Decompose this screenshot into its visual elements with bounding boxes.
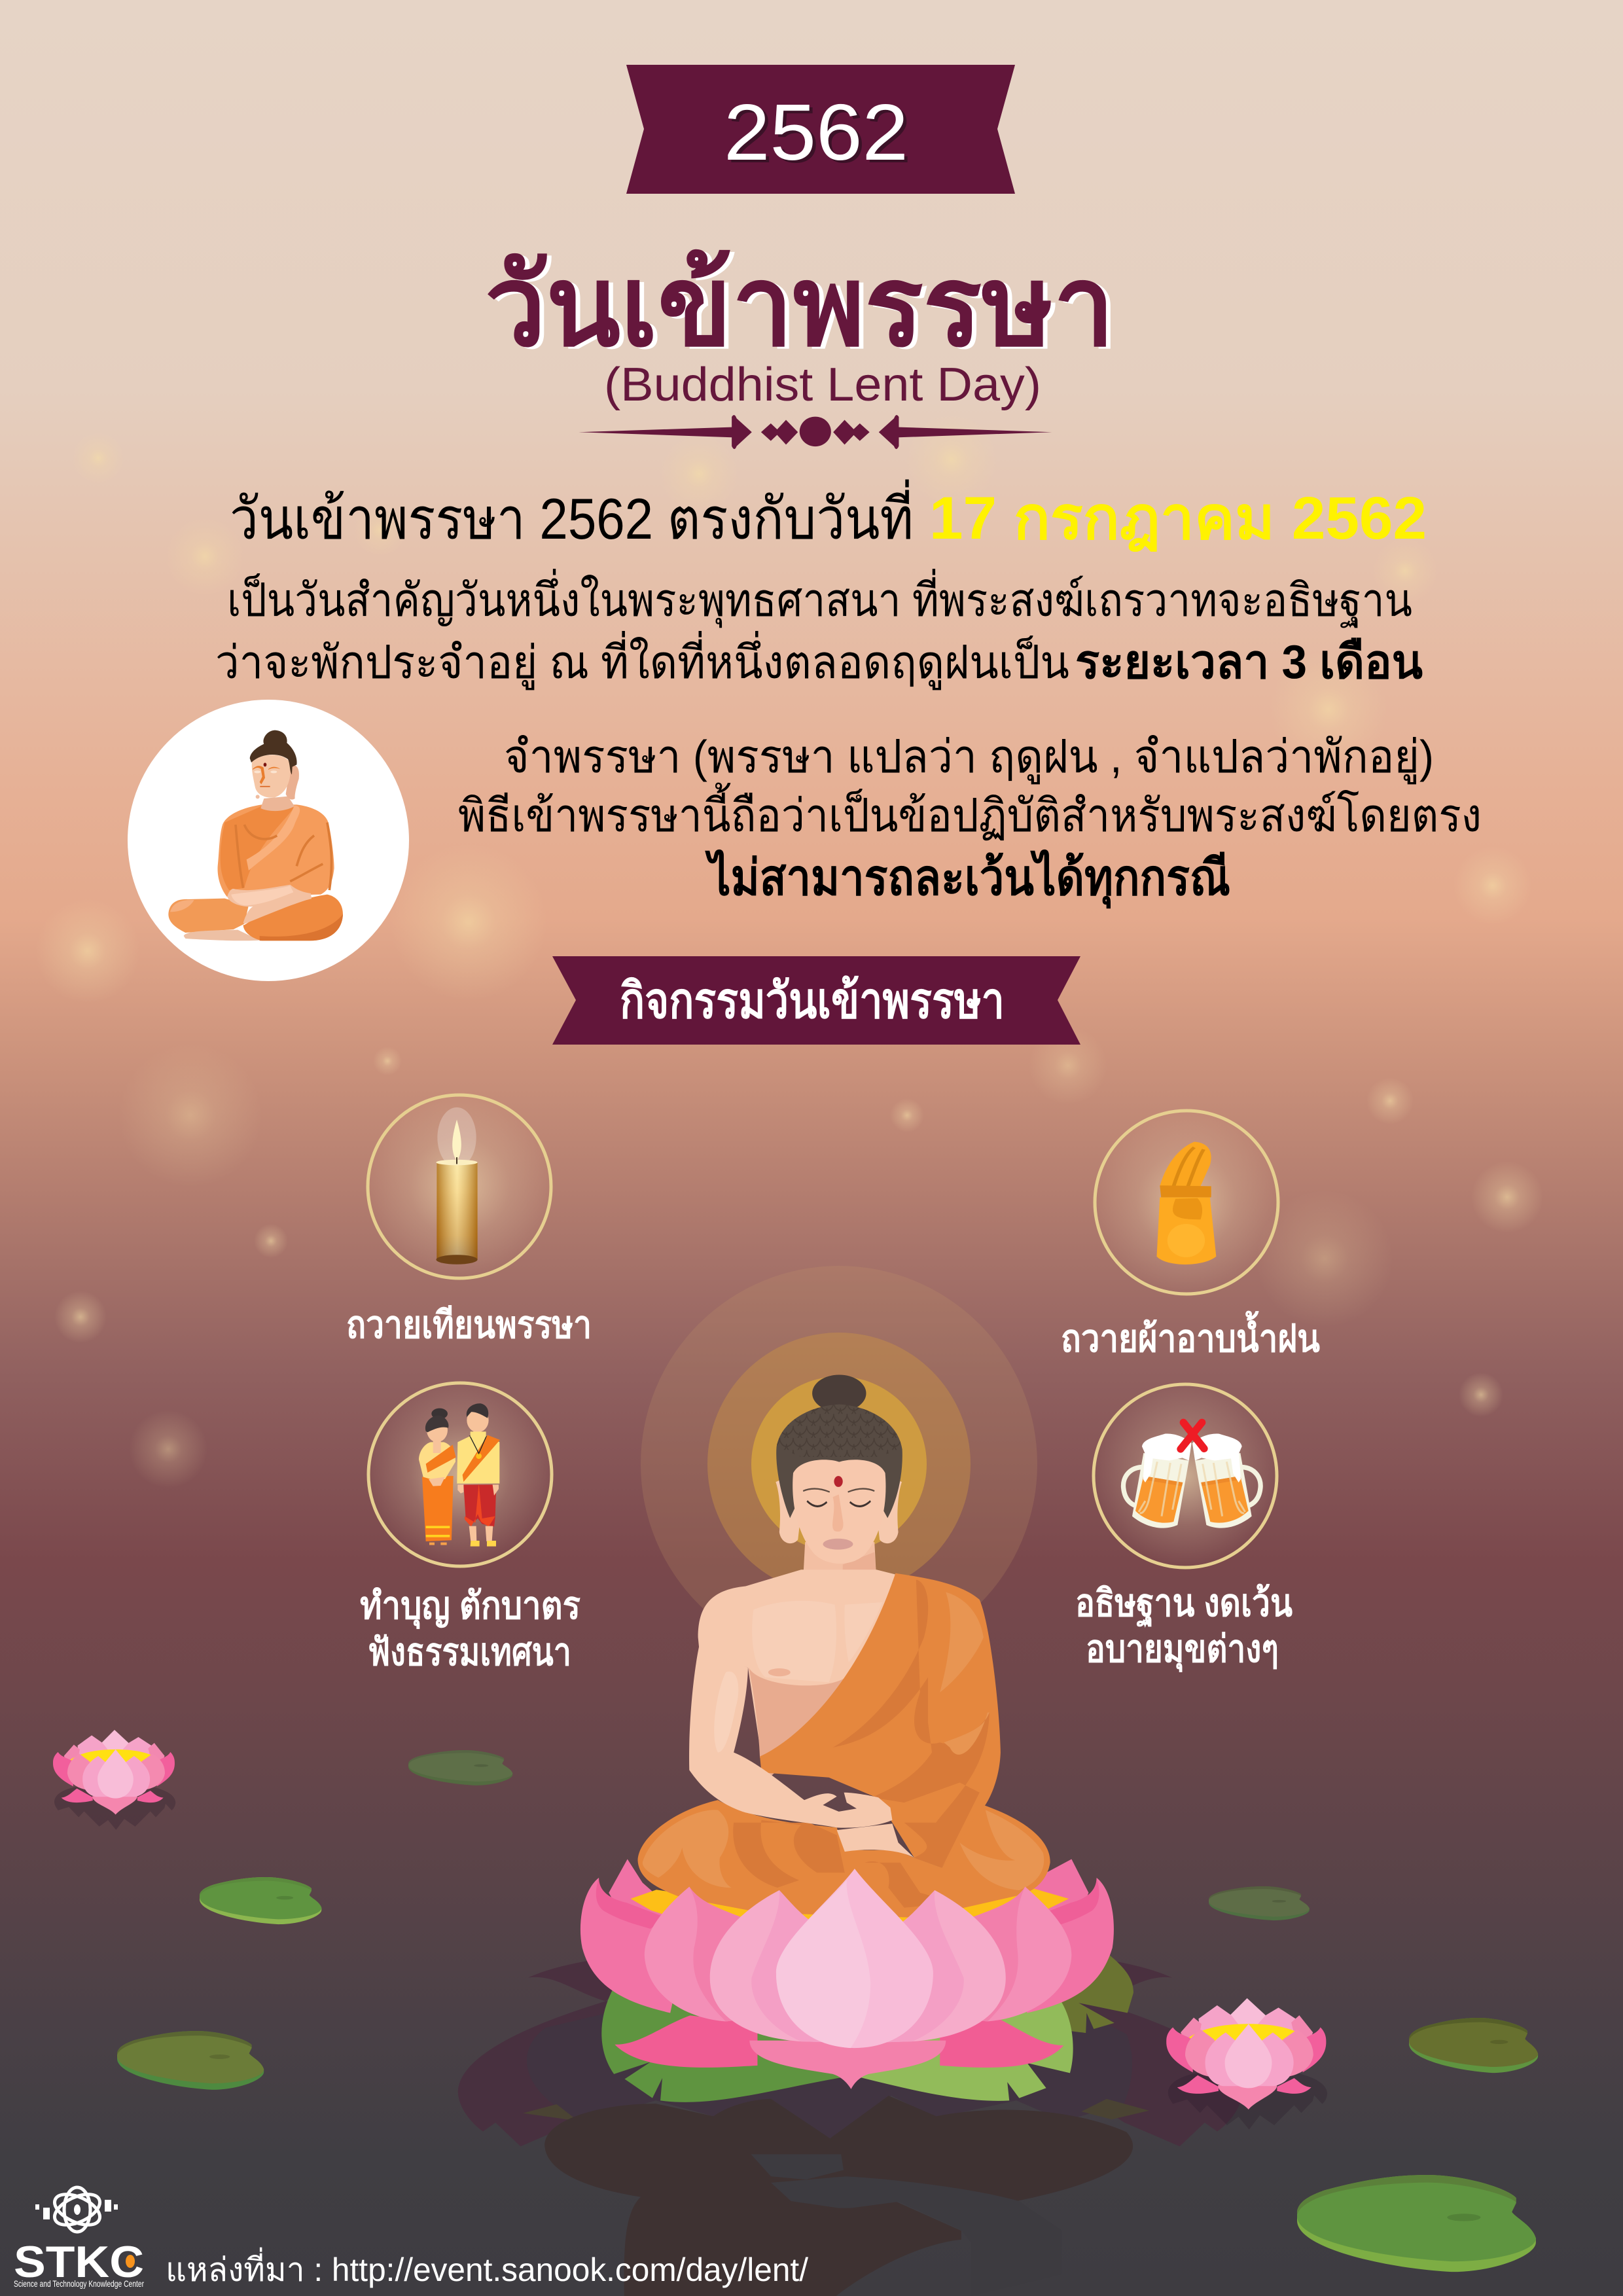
english subtitle: (Buddhist Lent Day) bbox=[604, 359, 1041, 411]
reflection: lotus wings bbox=[528, 1959, 1172, 2001]
lily pad 4 bbox=[1209, 1886, 1310, 1920]
panel: seated monk portrait bbox=[128, 700, 409, 981]
monk left leg bbox=[168, 899, 249, 933]
lily pad 6 bbox=[1297, 2175, 1536, 2272]
chest shade bbox=[749, 1667, 872, 1778]
leg folds bbox=[643, 1810, 1044, 1908]
bokeh lights bbox=[35, 414, 1543, 1488]
intro line 2: เป็นวันสำคัญวันหนึ่งในพระพุทธศาสนา ที่พระสงฆ์เถรวาทจะอธิษฐาน bbox=[227, 569, 1412, 628]
lotus side low petals bbox=[615, 2015, 1063, 2068]
intro line 1 bbox=[230, 479, 1427, 552]
banner: year bbox=[626, 65, 1015, 194]
buddha torso bbox=[698, 1570, 912, 1772]
lotus inner petals bbox=[710, 1890, 1006, 2043]
monk hands bbox=[227, 885, 312, 924]
monk ear bbox=[286, 765, 299, 800]
buddha figure on lotus bbox=[580, 1266, 1133, 2102]
intro line 3: ว่าจะพักประจำอยู่ ณ ที่ใดที่หนึ่งตลอดฤดูฝนเป็น bbox=[215, 631, 1069, 691]
buddha arm and hands bbox=[689, 1642, 892, 1828]
halo bbox=[641, 1266, 1037, 1662]
monk neck bbox=[260, 797, 294, 811]
lily pads under lotus bbox=[601, 1938, 1133, 2102]
paragraph line 1: จำพรรษา (พรรษา แปลว่า ฤดูฝน , จำแปลว่าพักอยู่) bbox=[504, 731, 1434, 785]
icon: candle bbox=[368, 1095, 551, 1278]
logo caption: Science and Technology Knowledge Center bbox=[14, 2278, 144, 2289]
lotus outer petals bbox=[580, 1878, 1114, 2013]
title: วันเข้าพรรษา bbox=[485, 243, 1115, 369]
intro line 3 bbox=[215, 631, 1423, 691]
lily pad 2 bbox=[200, 1877, 321, 1924]
reflection: legs and torso bbox=[544, 2096, 1133, 2296]
woman bbox=[422, 1476, 454, 1541]
lotus mid petals bbox=[645, 1887, 1071, 2022]
reflection: lotus lobes bbox=[458, 2001, 1242, 2146]
monk hair bbox=[250, 730, 297, 774]
buddha legs bbox=[637, 1800, 1050, 1918]
man bbox=[463, 1484, 496, 1527]
label: candle: ถวายเทียนพรรษา bbox=[346, 1304, 592, 1346]
lily pad 3 bbox=[117, 2031, 264, 2090]
icon: beer mugs crossed out bbox=[1094, 1384, 1277, 1568]
logo emblem bbox=[35, 2187, 118, 2232]
label: abstain line 1: อธิษฐาน งดเว้น bbox=[1075, 1582, 1293, 1628]
intro line 3: ระยะเวลา 3 เดือน bbox=[1075, 636, 1423, 689]
chest highlights bbox=[752, 1601, 882, 1682]
lily pad 5 bbox=[1409, 2018, 1538, 2073]
label: merit line 2: ฟังธรรมเทศนา bbox=[368, 1631, 571, 1674]
buddha robe bbox=[760, 1573, 1001, 1868]
monk foot bbox=[184, 930, 260, 941]
label: abstain line 2: อบายมุขต่างๆ bbox=[1086, 1628, 1279, 1673]
intro line 1: วันเข้าพรรษา 2562 ตรงกับวันที่ bbox=[230, 479, 914, 551]
monk body bbox=[218, 804, 334, 897]
lily pad 1 bbox=[408, 1750, 512, 1785]
lower hand bbox=[837, 1823, 914, 1857]
logo bbox=[14, 2187, 144, 2289]
paragraph line 3 bold: ไม่สามารถละเว้นได้ทุกกรณี bbox=[705, 849, 1230, 909]
banner heading: กิจกรรมวันเข้าพรรษา bbox=[620, 973, 1005, 1029]
lotus center petal bbox=[776, 1869, 933, 2048]
banner: activities bbox=[552, 956, 1080, 1045]
lotus back petals bbox=[609, 1859, 1088, 1933]
water reflection of buddha bbox=[458, 1959, 1242, 2296]
monk right leg bbox=[243, 895, 343, 941]
label: bathing robe: ถวายผ้าอาบน้ำฝน bbox=[1061, 1311, 1320, 1360]
ornament divider bbox=[579, 415, 1052, 449]
buddha head bbox=[776, 1375, 902, 1587]
logo wordmark: STKC bbox=[14, 2237, 144, 2287]
paragraph line 2: พิธีเข้าพรรษานี้ถือว่าเป็นข้อปฏิบัติสำหรับพระสงฆ์โดยตรง bbox=[458, 782, 1482, 841]
label: merit line 1: ทำบุญ ตักบาตร bbox=[360, 1585, 580, 1630]
monk features bbox=[253, 766, 280, 784]
source credit: แหล่งที่มา : http://event.sanook.com/day/lent/ bbox=[166, 2248, 808, 2288]
lotus bottom petal bbox=[749, 2041, 946, 2089]
year number: 2562 bbox=[724, 88, 908, 177]
intro line 1: 17 กรกฎาคม 2562 bbox=[929, 485, 1427, 552]
arm highlight bbox=[714, 1672, 738, 1753]
icon: couple making merit bbox=[368, 1383, 552, 1566]
small lotus left bbox=[53, 1730, 175, 1830]
monk face bbox=[252, 755, 291, 798]
small lotus right bbox=[1166, 1998, 1327, 2130]
icon: bathing robe bbox=[1095, 1111, 1278, 1294]
